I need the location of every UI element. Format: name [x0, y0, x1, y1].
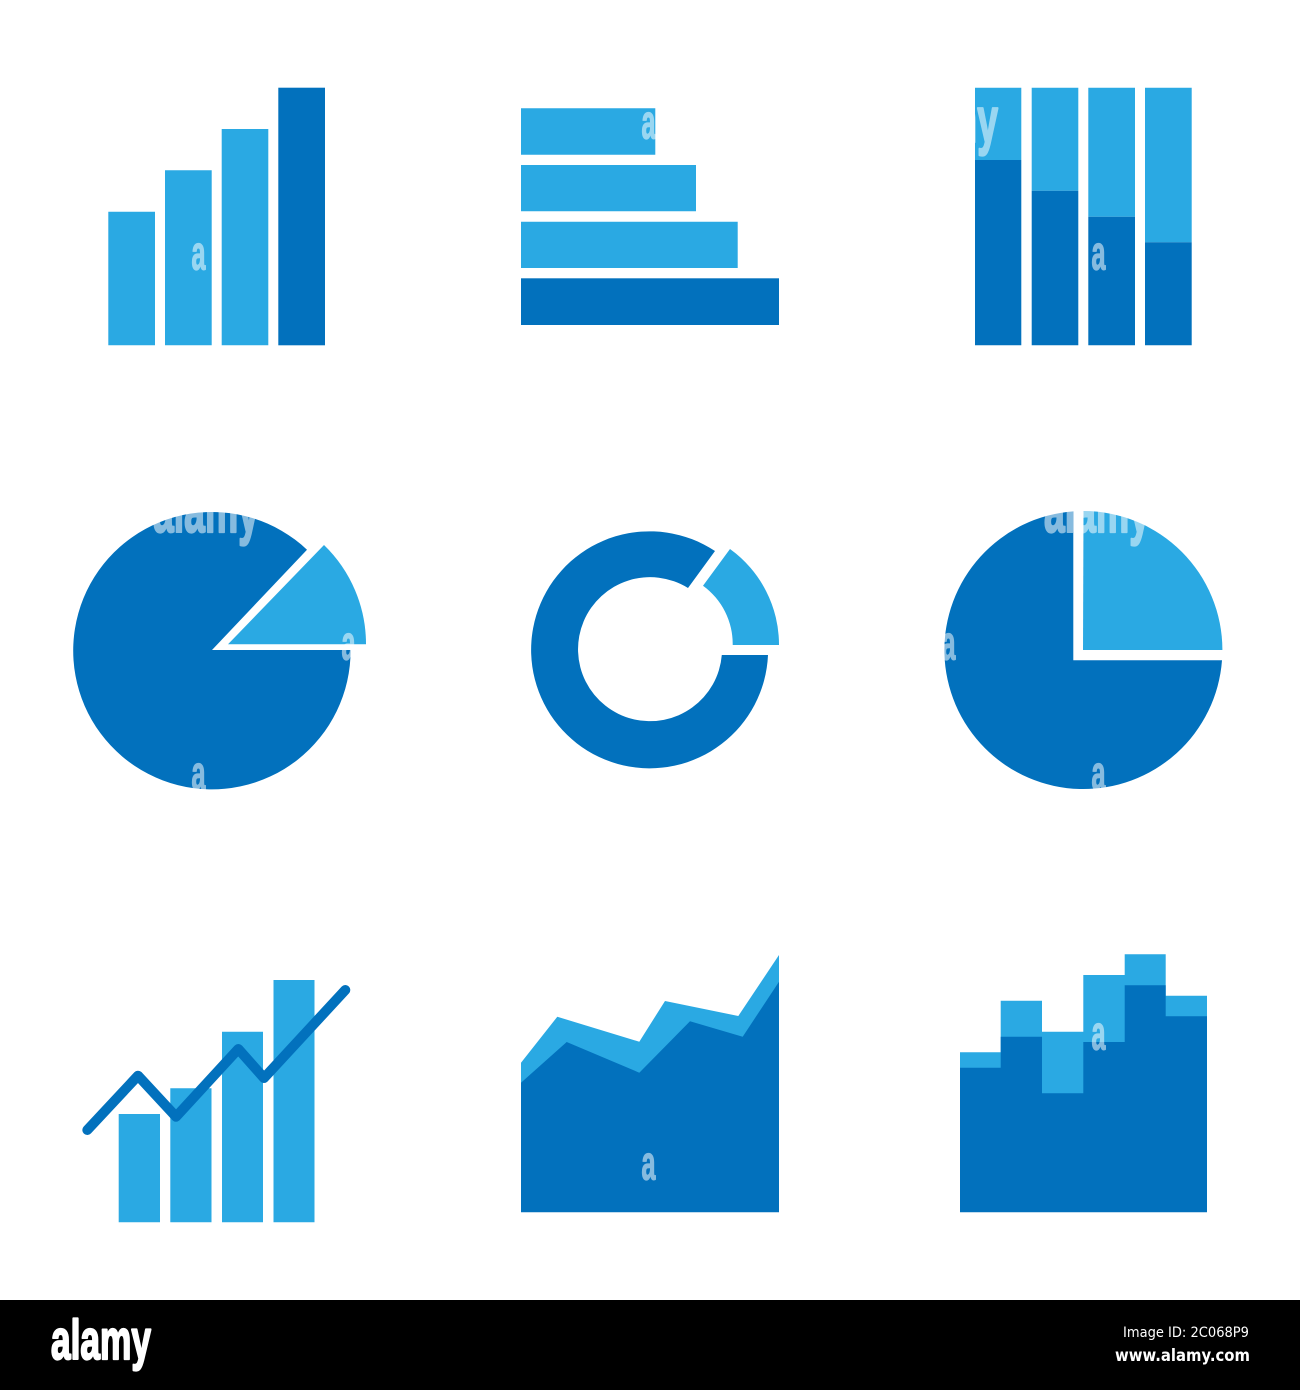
bars: light horizontal bars: [521, 108, 738, 268]
donut: dark ring: [531, 531, 768, 768]
bars: four light columns: [119, 980, 314, 1222]
bar: longest dark bar: [521, 278, 779, 325]
columns: light upper segments: [975, 88, 1192, 242]
pie: light wedge: [228, 545, 366, 644]
watermark letters over icons: a: [192, 228, 206, 280]
watermark letters over icons: a: [192, 748, 206, 800]
icon: donut chart: [531, 531, 779, 768]
pie: dark three quarters: [944, 511, 1222, 789]
icon: rising vertical bar chart: [108, 88, 325, 345]
watermark letters over icons: a: [1092, 228, 1106, 280]
pie: light quarter: [1083, 511, 1222, 650]
watermark letters over icons: alamy: [153, 474, 259, 546]
icon: horizontal bar chart: [521, 108, 779, 325]
line: dark trend line: [87, 990, 345, 1130]
area: dark front layer: [521, 982, 779, 1212]
steps: dark front layer: [960, 985, 1207, 1212]
pie: dark main body: [73, 512, 351, 789]
icon: pie chart with quarter slice: [944, 511, 1222, 789]
bar: tallest dark bar: [278, 88, 325, 345]
icon: bars with trend line: [87, 980, 345, 1222]
watermark letters over icons: a: [1092, 748, 1106, 800]
icon: pie chart with small wedge: [73, 512, 366, 789]
watermark letters over icons: a: [642, 1138, 656, 1190]
watermark letters over icons: [153, 84, 1150, 1190]
image id: Image ID: 2C068P9: [1123, 1325, 1249, 1341]
area: light back layer: [521, 955, 779, 1100]
watermark letters over icons: alamy: [892, 84, 998, 156]
icon: stepped area chart: [960, 954, 1207, 1212]
icon: stacked column chart: [975, 88, 1192, 345]
footer logo: alamy: [51, 1308, 151, 1371]
columns: dark lower segments: [975, 160, 1192, 345]
watermark letters over icons: a: [942, 618, 956, 670]
icon: area chart: [521, 955, 779, 1212]
watermark letters over icons: alamy: [1044, 474, 1150, 546]
watermark letters over icons: a: [1092, 1008, 1106, 1060]
bars: light rising bars: [108, 129, 268, 345]
website: www.alamy.com: [1115, 1346, 1250, 1366]
donut: light segment: [703, 549, 779, 645]
watermark letters over icons: a: [642, 96, 656, 150]
footer bar: [0, 1300, 1300, 1390]
watermark letters over icons: a: [342, 618, 356, 670]
steps: light back layer: [960, 954, 1207, 1100]
